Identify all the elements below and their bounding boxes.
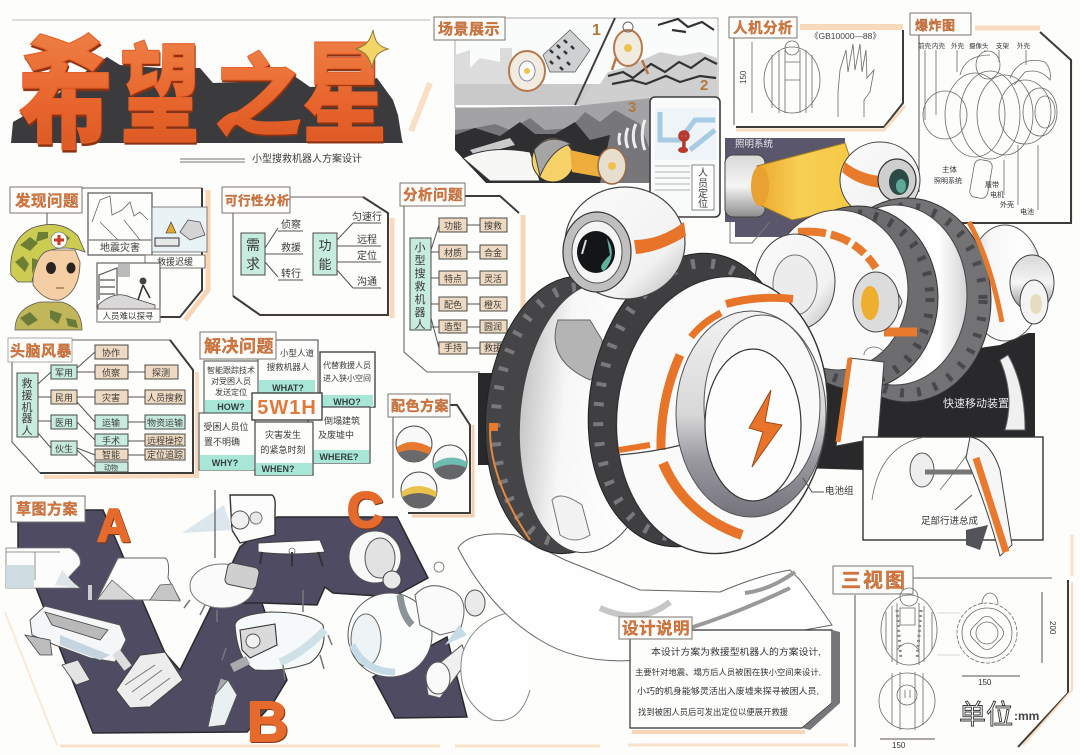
node: 救援机器人: 援 (22, 388, 32, 402)
lighting purple block (725, 138, 845, 237)
rows (439, 218, 507, 354)
panel: 爆炸图: 外壳 (1000, 200, 1014, 209)
heading (910, 13, 971, 35)
lighting module: 照明系统 (735, 138, 774, 150)
card: who: 进入狭小空间 (323, 373, 371, 383)
left body (474, 269, 675, 561)
card: who: 代替救援人员 (323, 360, 371, 370)
panel: 人机分析 (729, 17, 905, 130)
hub ring (676, 311, 826, 517)
unit label (959, 700, 1039, 730)
node: 小型搜救机器人 (410, 238, 431, 331)
panel: 头脑风暴: 运输 (102, 417, 120, 428)
panel: 爆炸图: 摄像头 (969, 41, 989, 50)
panel: 头脑风暴: 医用 (55, 418, 73, 428)
sketch B1 monitor (182, 495, 275, 543)
side view (937, 593, 1017, 663)
panel: 头脑风暴: 手术 (102, 435, 120, 446)
body text: 找到被困人员后可发出定位以便展开救援 (638, 707, 789, 717)
node: 救援机器人 (17, 373, 38, 437)
panel: 爆炸图: 主体 (942, 164, 957, 174)
body text: 主要针对地震、塌方后人员被困在狭小空间来设计, (635, 667, 821, 677)
card: who (320, 352, 375, 407)
sketch A1 (6, 548, 80, 588)
card: what: 小型人道 (280, 348, 314, 358)
dimensions: 150 (892, 741, 906, 750)
panel: 可行性分析 (222, 187, 392, 318)
letter A: A (97, 499, 130, 551)
panel: 头脑风暴: 智能 (102, 449, 120, 460)
panel: 头脑风暴: 定位追踪 (147, 449, 183, 460)
panel: 爆炸图: 前壳 (918, 41, 932, 50)
panel: 场景展示 (434, 17, 720, 217)
mountain backdrop (11, 57, 403, 143)
panel: 解决问题 5W1H (199, 332, 375, 475)
title: 希望之星: 希 (18, 0, 113, 174)
card: why (199, 413, 255, 470)
lighting module (725, 138, 866, 243)
panel: 设计说明 (619, 617, 840, 732)
hero: main robot (458, 138, 1054, 661)
yellow lamp (853, 272, 902, 332)
right lower leg hint (1000, 355, 1025, 430)
panel: 发现问题 (10, 187, 208, 330)
node: 功能 (313, 233, 337, 275)
front view wireframe (764, 41, 820, 113)
heading: 头脑风暴 (10, 342, 72, 360)
sketch B4 main dome (208, 590, 332, 727)
card: how: 对受困人员 (211, 376, 251, 386)
dimension 150: 150 (739, 70, 748, 84)
panel: 分析问题: 合金 (484, 247, 502, 258)
card: when: WHEN? (262, 464, 294, 474)
card: when (255, 422, 313, 475)
panel: 头脑风暴: 远程操控 (147, 435, 183, 446)
phone map: 位 (698, 197, 708, 210)
sketch A tank (25, 606, 183, 708)
phone map: 人 (698, 167, 708, 179)
hand sketch (838, 44, 874, 117)
panel: 头脑风暴: 协作 (102, 347, 120, 358)
icon: soldier (11, 224, 85, 330)
swatch teal (433, 445, 467, 480)
card: why: WHY? (212, 458, 238, 468)
sketch: 人员难以探寻: 人员难以探寻 (102, 311, 154, 321)
title: 希望之星: 之 (214, 26, 302, 153)
left head (563, 187, 686, 299)
letter C: C (347, 482, 383, 538)
subtitle (180, 152, 362, 165)
exploded wireframe (923, 50, 1057, 210)
panel: 头脑风暴: 侦察 (102, 367, 120, 378)
node: 小型搜救机器人: 机 (414, 292, 426, 306)
swatch yellow (401, 472, 437, 508)
front view (881, 588, 937, 665)
sketch C ball (349, 531, 401, 589)
panel: 可行性分析: 侦察 (281, 218, 301, 231)
heading (729, 17, 797, 38)
panel: 爆炸图: 履带 (985, 181, 999, 189)
panel: 分析问题: 灵活 (484, 273, 502, 284)
panel: 头脑风暴: 动物 (104, 463, 118, 472)
panel: 爆炸图: 内壳 (932, 41, 946, 50)
sketch B2 dome (184, 490, 260, 622)
phone map: 定 (698, 187, 708, 200)
node: 需求 (241, 233, 265, 275)
panel: 分析问题: 搜救 (484, 220, 502, 231)
sketch B3 table (258, 540, 325, 566)
card: how: HOW? (217, 402, 245, 412)
scene 3 rescue: 3 (628, 99, 636, 116)
panel: 分析问题: 造型 (444, 321, 462, 332)
right tire (823, 198, 1002, 402)
upper right head (840, 142, 920, 218)
panel: 可行性分析: 匀速行 (352, 210, 382, 223)
col 1 (51, 365, 77, 455)
node: 救援机器人: 救 (22, 376, 32, 390)
heading: 草图方案 (16, 500, 78, 518)
label: 电池组: 电池组 (825, 485, 854, 497)
right rear body (967, 225, 1054, 341)
phone map (650, 97, 720, 217)
unit label: :mm (1014, 709, 1039, 723)
card: where: 倒塌建筑 (324, 415, 360, 426)
panel: 分析问题: 功能 (444, 220, 462, 231)
panel: 三视图 (833, 566, 1072, 750)
sketch C big sphere (348, 593, 432, 677)
panel: 分析问题 (400, 183, 523, 372)
panel: 爆炸图: 电机 (990, 190, 1004, 199)
panel: 头脑风暴: 伙生 (55, 443, 73, 454)
node: 救援机器人: 人 (22, 424, 32, 437)
sketch: 救援迟缓 (145, 207, 207, 268)
card: when: 灾害发生 (265, 429, 301, 440)
heading: 设计说明 (622, 619, 690, 638)
node: 小型搜救机器人: 型 (414, 253, 426, 267)
heading: 分析问题 (403, 186, 463, 204)
panel: 头脑风暴: 民用 (55, 393, 73, 403)
sketch C dome (415, 562, 485, 698)
panel: 爆炸图 (910, 13, 1071, 223)
unit label: 单位 (959, 700, 1013, 730)
node: 小型搜救机器人: 搜 (414, 266, 426, 280)
detail box: foot: 足部行进总成 (921, 515, 979, 527)
heading: 解决问题 (204, 337, 274, 356)
panel: 分析问题: 配色 (444, 299, 462, 310)
heading (434, 17, 505, 40)
heading: 场景展示 (438, 21, 500, 38)
heading (11, 496, 85, 522)
node: 功能: 功 (318, 238, 332, 253)
label: 电池组 (803, 478, 854, 497)
heading: 配色方案 (391, 398, 449, 414)
scene 1 city (455, 22, 601, 105)
dimensions: 200 (1048, 621, 1057, 635)
card: why: 受困人员位 (203, 421, 249, 432)
panel: 爆炸图: 照明系统 (934, 176, 962, 185)
heading (200, 332, 276, 359)
panel: 分析问题: 手持 (444, 342, 462, 353)
detail box: foot (863, 437, 1043, 556)
heading (8, 338, 72, 362)
hand (458, 534, 832, 661)
node: 功能: 能 (318, 257, 332, 272)
panel: 人机分析: 《GB10000—88》 (810, 31, 881, 41)
card: what (258, 340, 318, 393)
col 3 (145, 365, 185, 460)
panel: 可行性分析: 定位 (357, 249, 377, 262)
panel: 头脑风暴: 探测 (152, 367, 170, 378)
heading: 可行性分析 (225, 193, 290, 208)
panel: 头脑风暴: 灾害 (102, 392, 120, 403)
node: 小型搜救机器人: 救 (414, 279, 426, 293)
badge: 5W1H (252, 393, 322, 420)
heading: 三视图 (841, 569, 907, 592)
card: how: 发送定位 (215, 387, 247, 397)
sketch: 地震灾害: 地震灾害 (100, 241, 140, 254)
panel: 爆炸图: 外壳 (1017, 41, 1030, 50)
card: where: WHERE? (320, 452, 358, 462)
panel: 配色方案 (388, 394, 473, 516)
node: 需求: 需 (246, 237, 260, 253)
card: who: WHO? (333, 397, 361, 407)
panel: 可行性分析: 救援 (281, 241, 301, 254)
panel: 可行性分析: 沟通 (357, 275, 377, 288)
label: 快速移动装置: 快速移动装置 (943, 397, 1009, 410)
card: what: WHAT? (272, 383, 304, 393)
scene 3 rescue (455, 98, 652, 184)
dimensions (880, 592, 1057, 750)
heading: 爆炸图 (915, 18, 956, 33)
title: 希望之星: 星 (302, 7, 387, 165)
bottom view (879, 672, 935, 730)
panel: 爆炸图: 支架 (996, 41, 1010, 50)
card: where: 及废墟中 (318, 429, 354, 440)
body text (635, 646, 821, 717)
node: 救援机器人: 机 (22, 400, 32, 414)
panel: 头脑风暴: 军用 (55, 368, 73, 378)
heading (10, 187, 82, 213)
purple backdrop (18, 510, 467, 733)
card: how (204, 361, 258, 413)
body text: 本设计方案为救援型机器人的方案设计, (651, 646, 821, 657)
node: 需求: 求 (246, 256, 260, 272)
card: what: 搜救机器人 (267, 362, 310, 372)
panel: 可行性分析: 远程 (357, 234, 377, 246)
black backdrop band (478, 333, 1035, 470)
node: 小型搜救机器人: 人 (414, 318, 426, 331)
node: 小型搜救机器人: 小 (414, 241, 426, 254)
scene 2 rubble: 2 (700, 77, 708, 94)
right disc (768, 206, 938, 390)
scene 2 rubble (578, 19, 717, 108)
node: 救援机器人: 器 (22, 412, 32, 425)
heading: 发现问题 (15, 191, 79, 210)
heading: 人机分析 (733, 19, 793, 37)
badge: 5W1H: 5W1H (257, 397, 317, 419)
sketch A2 (90, 558, 180, 601)
scene 1 city: 1 (592, 22, 601, 39)
divider slant (575, 18, 615, 105)
title: 希望之星: 望 (120, 9, 200, 165)
title: 希望之星 (11, 0, 403, 174)
panel: 分析问题: 橙灰 (484, 299, 502, 310)
card: why: 置不明确 (204, 436, 240, 447)
subtitle: 小型搜救机器人方案设计 (252, 152, 362, 165)
panel: 头脑风暴: 物资运输 (147, 417, 183, 428)
panel: 爆炸图: 电池 (1020, 207, 1034, 216)
swatch orange (396, 426, 432, 465)
panel: 分析问题: 圆润 (484, 321, 502, 332)
card: when: 的紧急时刻 (260, 444, 306, 455)
dimensions: 150 (978, 678, 992, 687)
heading (222, 187, 290, 213)
dimension 150 (739, 42, 752, 113)
node: 小型搜救机器人: 器 (414, 306, 426, 319)
panel: 可行性分析: 转行 (281, 267, 301, 280)
leg (836, 347, 884, 446)
panel: 爆炸图: 外壳 (951, 41, 964, 50)
panel: 分析问题: 救援 (484, 342, 502, 353)
panel: 分析问题: 特点 (444, 273, 462, 284)
panel: 分析问题: 材质 (444, 247, 462, 258)
icon: lightning bolt (749, 390, 782, 467)
letter B: B (247, 690, 288, 754)
front disc (601, 264, 843, 566)
heading (400, 183, 465, 206)
sketch: 地震灾害 (88, 193, 152, 255)
card: where (308, 407, 370, 463)
card: how: 智能跟踪技术 (207, 365, 255, 375)
front tire (566, 237, 814, 563)
sketch C horn (461, 610, 530, 721)
sketch: 人员难以探寻 (97, 263, 160, 322)
panel: 头脑风暴 (8, 338, 197, 477)
sketch: 救援迟缓: 救援迟缓 (157, 256, 193, 267)
body text: 小巧的机身能够灵活出入废墟来探寻被困人员, (637, 685, 819, 696)
phone map: 员 (698, 178, 708, 190)
panel: 草图方案 (6, 482, 530, 754)
panel: 头脑风暴: 人员搜救 (147, 392, 183, 403)
right hub (755, 234, 835, 330)
heading (833, 566, 913, 594)
col 2 (95, 345, 128, 472)
